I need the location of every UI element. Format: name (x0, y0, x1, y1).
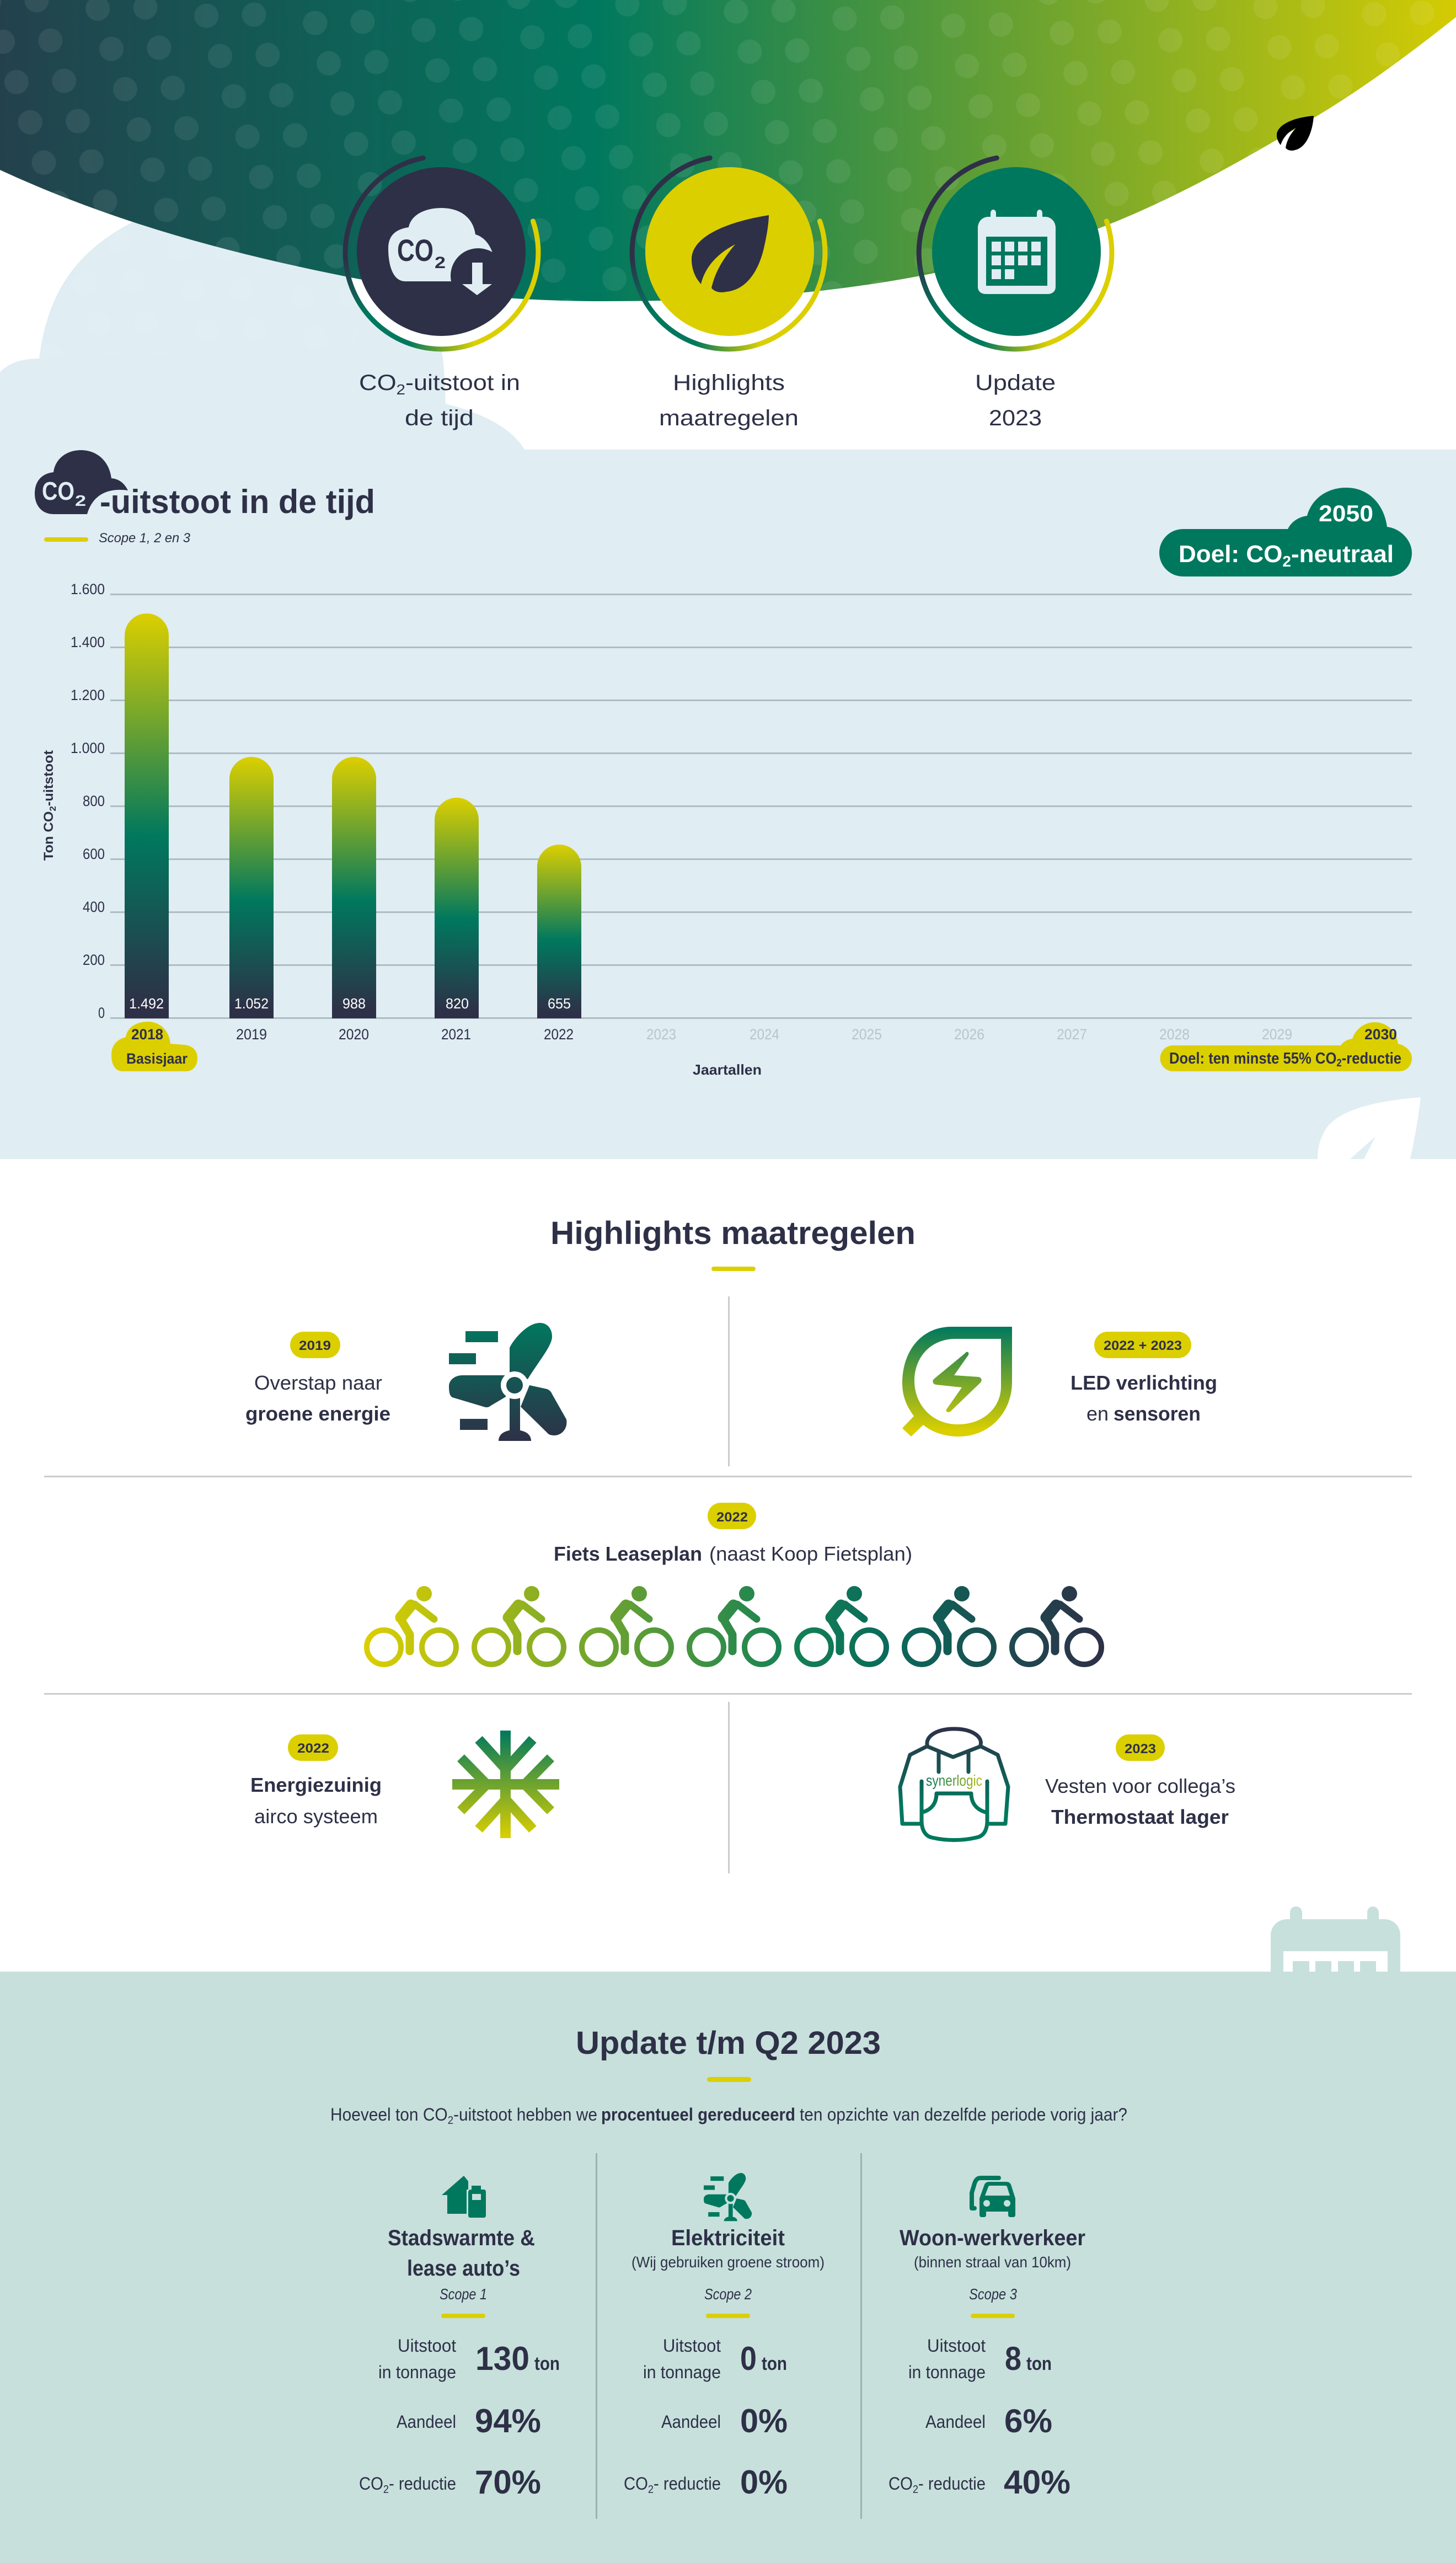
metric: reductie: 0% (740, 2464, 788, 2501)
year badge (708, 1503, 756, 1529)
metric: uitstoot: Uitstoot (663, 2336, 721, 2356)
metric: uitstoot: in tonnage (908, 2362, 986, 2382)
text block: airco systeem (254, 1805, 378, 1828)
text block (245, 1371, 390, 1425)
text block: sensoren (1114, 1402, 1201, 1425)
bar 2022 (537, 845, 581, 1018)
y axis labels: 1.400 (71, 634, 105, 650)
grid lines (110, 595, 1412, 1018)
intro text: 2 (448, 2115, 453, 2127)
metric: uitstoot: in tonnage (378, 2362, 456, 2382)
icon: CO2 cloud circle: CO (397, 233, 433, 268)
callout: doel 2050 (1159, 488, 1412, 576)
x axis labels: 2019 (236, 1026, 267, 1043)
metric: reductie: 70% (475, 2464, 541, 2501)
label: Update 2023: 2023 (989, 406, 1042, 430)
icon: calendar watermark (1271, 1907, 1400, 1975)
y axis title: -uitstoot (41, 750, 56, 806)
icon: calendar circle (919, 158, 1112, 349)
year badge: 2023 (1125, 1742, 1156, 1756)
metric: uitstoot: Uitstoot (398, 2336, 456, 2356)
metric: aandeel (925, 2402, 1052, 2439)
column dividers (596, 2153, 862, 2519)
label: CO2-uitstoot in de tijd: CO (359, 371, 392, 395)
heading underline (707, 2077, 751, 2082)
legend: scope (44, 531, 191, 546)
column: scope 3 (888, 2178, 1085, 2501)
x axis labels (236, 1026, 1292, 1043)
x axis labels: 2021 (441, 1026, 471, 1043)
icon: leaf with bolt (902, 1327, 1012, 1437)
year badge: 2019 (299, 1338, 331, 1353)
metric: uitstoot: ton (1026, 2353, 1052, 2374)
text block: en (1086, 1402, 1109, 1425)
scope (704, 2286, 752, 2318)
top gradient arc header (0, 0, 1456, 301)
year badge (1116, 1734, 1165, 1761)
year badge: 2022 (297, 1741, 329, 1756)
item: LED verlichting (902, 1327, 1217, 1437)
metric: reductie (888, 2464, 1070, 2501)
y axis labels: 800 (83, 793, 105, 809)
metric: reductie: 2 (913, 2484, 918, 2496)
metric: uitstoot: in tonnage (643, 2362, 721, 2382)
background cloud behind menu (0, 215, 524, 450)
bar 2020: 988 (342, 995, 366, 1012)
x axis title: Jaartallen (693, 1061, 762, 1078)
callout: doel 2030: 2 (1336, 1058, 1342, 1069)
heading: cloud and title: CO (42, 477, 74, 505)
metric: reductie: 40% (1004, 2464, 1070, 2501)
panel: CO2-uitstoot in de tijd (0, 450, 1456, 1159)
text block (250, 1774, 382, 1828)
y axis labels: 600 (83, 846, 105, 862)
title: lease auto’s (407, 2256, 520, 2281)
scope: Scope 3 (969, 2286, 1017, 2303)
metric: reductie: CO (359, 2474, 386, 2493)
bar 2020 (332, 757, 376, 1018)
text block: (naast Koop Fietsplan) (709, 1542, 912, 1565)
heading: cloud and title: 2 (75, 492, 86, 509)
label: CO2-uitstoot in de tijd: 2 (397, 381, 405, 398)
heading: Update t/m Q2 2023: Update t/m Q2 2023 (576, 2025, 881, 2061)
metric: uitstoot (908, 2336, 1052, 2382)
icon: hoodie (900, 1729, 1008, 1840)
callout: basisjaar 2018: Basisjaar (126, 1050, 188, 1067)
icon: small black leaf (1277, 116, 1314, 151)
metric: aandeel (397, 2402, 541, 2439)
label: Highlights maatregelen: Highlights (673, 371, 785, 395)
title: Elektriciteit (671, 2226, 785, 2250)
metric: uitstoot: ton (534, 2353, 560, 2374)
y axis labels (71, 581, 105, 1021)
metric: uitstoot (643, 2336, 787, 2382)
title (388, 2226, 535, 2281)
year badge (1094, 1332, 1191, 1358)
intro text: Hoeveel ton CO (330, 2105, 456, 2124)
x axis labels: 2022 (544, 1026, 574, 1043)
y axis labels: 200 (83, 952, 105, 968)
metric: uitstoot (378, 2336, 560, 2382)
callout: doel 2030: -reductie (1342, 1050, 1401, 1067)
metric: reductie: - reductie (389, 2474, 456, 2493)
x axis labels: 2020 (339, 1026, 369, 1043)
callout: doel 2050: 2050 (1319, 500, 1373, 526)
year badge (288, 1734, 338, 1761)
x axis labels: 2027 (1057, 1026, 1087, 1043)
metric: reductie: 2 (648, 2484, 654, 2496)
heading: cloud and title: -uitstoot in de tijd (100, 483, 375, 520)
icon: snowflake (452, 1731, 559, 1838)
y axis labels: 400 (83, 899, 105, 915)
title: (Wij gebruiken groene stroom) (631, 2254, 825, 2271)
icon: row of cyclists (367, 1586, 1101, 1664)
icon: heading cloud (35, 450, 128, 514)
white disc backing the menu icons (347, 158, 1110, 348)
menu item: CO2-uitstoot (345, 158, 538, 430)
metric: aandeel: Aandeel (661, 2412, 721, 2432)
callout: doel 2050: Doel: CO (1179, 541, 1282, 568)
metric: uitstoot: Uitstoot (927, 2336, 986, 2356)
intro text: procentueel gereduceerd (601, 2105, 795, 2124)
intro text: ten opzichte van dezelfde periode vorig jaar? (800, 2105, 1127, 2124)
icon: cars (972, 2178, 1015, 2217)
scope: Scope 2 (704, 2286, 752, 2303)
metric: reductie (624, 2464, 788, 2501)
y axis labels: 0 (98, 1005, 105, 1021)
x axis labels: 2026 (954, 1026, 984, 1043)
metric: reductie: CO (888, 2474, 915, 2493)
x axis labels: 2028 (1159, 1026, 1190, 1043)
metric: uitstoot: 130 (475, 2340, 529, 2377)
y axis labels: 1.000 (71, 740, 105, 756)
title: Stadswarmte & (388, 2226, 535, 2250)
label: Update 2023: Update (975, 371, 1056, 395)
intro text (330, 2105, 1127, 2127)
scope (440, 2286, 487, 2318)
bar 2019 (229, 757, 274, 1018)
metric: reductie: CO (624, 2474, 650, 2493)
text block: Overstap naar (254, 1371, 382, 1394)
menu item: Update (919, 158, 1112, 430)
y axis labels: 1.200 (71, 687, 105, 703)
metric: reductie: - reductie (918, 2474, 986, 2493)
label: CO2-uitstoot in de tijd (359, 371, 520, 430)
text block: Vesten voor collega’s (1045, 1775, 1235, 1797)
menu item: Highlights (632, 158, 825, 430)
bar 2022: 655 (548, 995, 571, 1012)
metric: aandeel: 0% (740, 2402, 788, 2439)
scope (969, 2286, 1017, 2318)
text block: groene energie (245, 1402, 390, 1425)
bar 2021 (435, 798, 479, 1018)
y axis title: 2 (49, 806, 58, 811)
item: fiets leaseplan (367, 1503, 1101, 1664)
icon: house and battery (442, 2176, 486, 2218)
title: Woon-werkverkeer (900, 2226, 1085, 2250)
icon: leaf circle (632, 158, 825, 349)
text block (554, 1542, 912, 1565)
bar 2018 (125, 613, 169, 1018)
heading: Highlights maatregelen: Highlights maatregelen (550, 1215, 916, 1251)
x axis labels: 2025 (852, 1026, 882, 1043)
metric: reductie (359, 2464, 541, 2501)
callout: basisjaar 2018 (111, 1022, 197, 1071)
hoodie logo: synerlogic (926, 1772, 982, 1789)
text block (1070, 1371, 1217, 1425)
icon: CO2 cloud circle (345, 158, 538, 349)
title (631, 2226, 825, 2271)
column: scope 1 (359, 2176, 560, 2501)
item: vesten (900, 1729, 1235, 1840)
bar 2021: 820 (446, 995, 469, 1012)
callout: doel 2030 (1160, 1022, 1412, 1071)
y axis labels: 1.600 (71, 581, 105, 597)
panel: update t/m Q2 2023 (0, 1907, 1456, 2563)
icon: white leaf watermark (1318, 1097, 1421, 1159)
text block: Thermostaat lager (1051, 1806, 1229, 1828)
icon: CO2 cloud circle: 2 (435, 254, 446, 272)
item: airco (250, 1731, 559, 1838)
label: Highlights maatregelen: maatregelen (659, 406, 799, 430)
text block (1045, 1775, 1235, 1828)
label: CO2-uitstoot in de tijd: -uitstoot in (405, 371, 520, 395)
label: CO2-uitstoot in de tijd: de tijd (405, 406, 474, 430)
x axis labels: 2023 (646, 1026, 676, 1043)
panel: highlights maatregelen (44, 1215, 1412, 1873)
scope: Scope 1 (440, 2286, 487, 2303)
label: Highlights maatregelen (659, 371, 799, 430)
cloud dot pattern (39, 215, 386, 359)
metric: uitstoot: 8 (1005, 2340, 1021, 2377)
text block: Fiets Leaseplan (554, 1542, 702, 1565)
heading: cloud and title (35, 450, 375, 520)
metric: aandeel (661, 2402, 788, 2439)
label: Update 2023 (975, 371, 1056, 430)
metric: reductie: 2 (383, 2484, 389, 2496)
legend: scope: Scope 1, 2 en 3 (99, 531, 191, 546)
year badge: 2022 + 2023 (1104, 1338, 1182, 1353)
dividers (44, 1296, 1412, 1873)
callout: basisjaar 2018: 2018 (131, 1026, 163, 1043)
bar 2018: 1.492 (129, 995, 164, 1012)
metric: uitstoot: ton (762, 2353, 787, 2374)
callout: doel 2050: -neutraal (1291, 541, 1394, 568)
title: (binnen straal van 10km) (914, 2254, 1071, 2271)
metric: aandeel: Aandeel (397, 2412, 456, 2432)
title (900, 2226, 1085, 2271)
metric: reductie: - reductie (654, 2474, 721, 2493)
intro text: -uitstoot hebben we (453, 2105, 597, 2124)
metric: aandeel: 94% (475, 2402, 541, 2439)
metric: uitstoot: 0 (740, 2340, 757, 2377)
callout: doel 2050: 2 (1282, 553, 1291, 570)
callout: doel 2030: Doel: ten minste 55% CO (1169, 1050, 1358, 1067)
icon: small wind turbine (704, 2173, 752, 2221)
item: groene energie (245, 1323, 566, 1441)
text block: Energiezuinig (250, 1774, 382, 1796)
x axis labels: 2024 (750, 1026, 779, 1043)
metric: aandeel: Aandeel (925, 2412, 986, 2432)
callout: doel 2030: 2030 (1364, 1026, 1397, 1043)
bar 2019: 1.052 (234, 995, 269, 1012)
heading underline (711, 1267, 756, 1271)
x axis labels: 2029 (1262, 1026, 1292, 1043)
text block: LED verlichting (1070, 1371, 1217, 1394)
year badge (290, 1332, 340, 1358)
bar chart (41, 581, 1412, 1078)
y axis title: Ton CO (41, 814, 56, 861)
metric: aandeel: 6% (1004, 2402, 1052, 2439)
column: scope 2 (624, 2173, 825, 2501)
icon: wind turbine (449, 1323, 566, 1441)
year badge: 2022 (716, 1510, 748, 1525)
